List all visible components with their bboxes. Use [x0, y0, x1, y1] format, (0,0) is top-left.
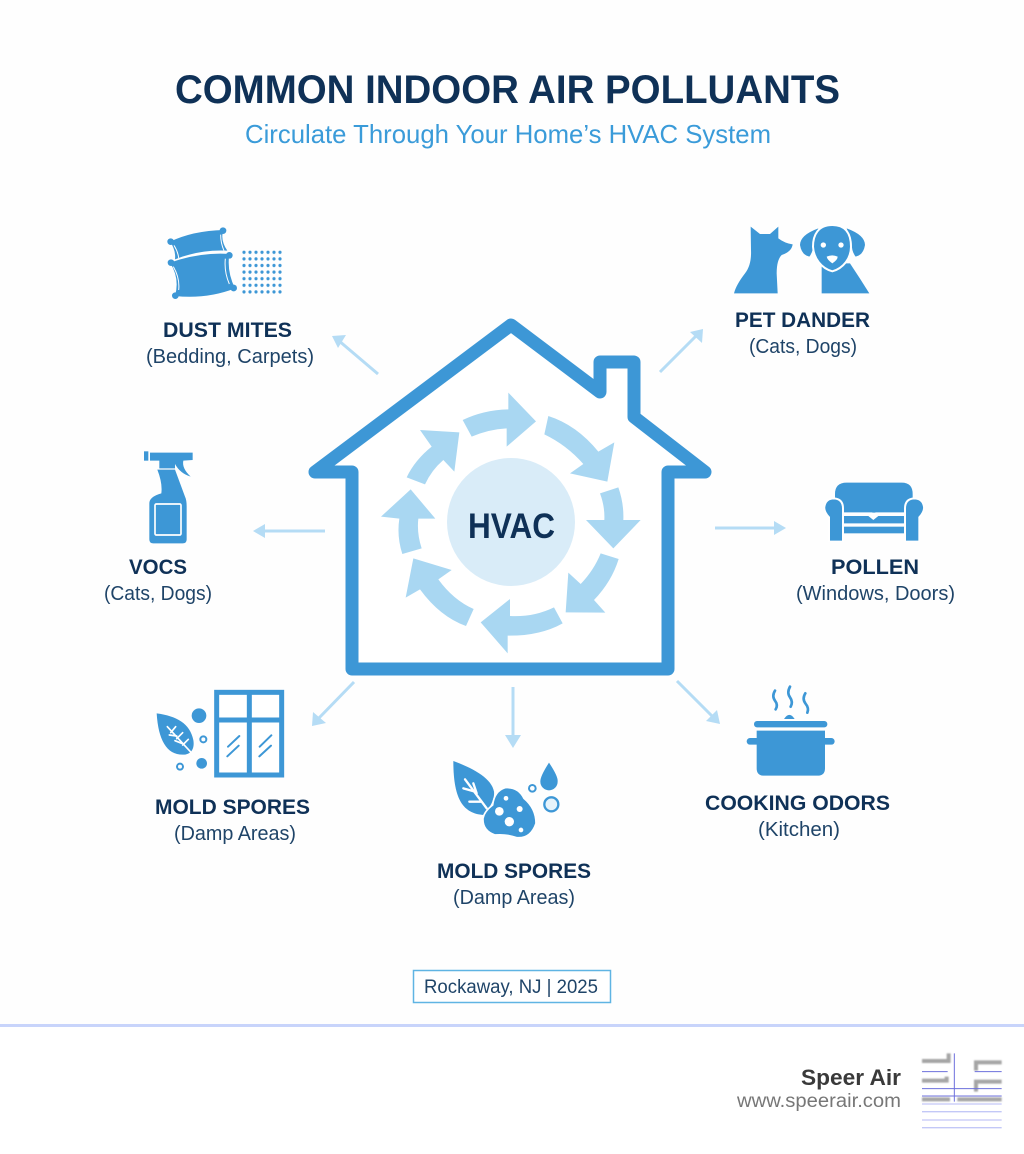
panel: cooking odors [705, 687, 890, 841]
panel: VOCs [104, 451, 212, 605]
footer band [0, 1024, 1024, 1154]
sources: (Cats, Dogs) [104, 583, 212, 605]
brand name: Speer Air [801, 1065, 901, 1090]
location box: Rockaway, NJ | 2025 [424, 977, 598, 998]
location box [414, 970, 610, 1002]
heading: VOCS [129, 556, 187, 579]
heading: PET DANDER [735, 309, 870, 332]
heading: DUST MITES [163, 319, 292, 342]
sources: (Cats, Dogs) [749, 336, 857, 358]
arrow: to pollen [715, 521, 786, 535]
sources: (Windows, Doors) [796, 583, 955, 605]
arrow: to mold spores center [505, 687, 521, 748]
icon: spray bottle [144, 451, 193, 543]
arrow: to pet dander [660, 329, 703, 372]
house outline [315, 325, 705, 669]
subtitle: Circulate Through Your Home’s HVAC System [245, 119, 771, 149]
heading: COOKING ODORS [705, 792, 890, 815]
icon: leaf, spores and window [157, 692, 282, 775]
airflow arrows ring [381, 393, 641, 653]
icon: leaf, mold and droplet [453, 761, 558, 838]
panel: mold spores left [155, 692, 310, 845]
icon: pillows with dust [167, 227, 283, 299]
heading: MOLD SPORES [437, 860, 591, 883]
logo [922, 1053, 1002, 1128]
sources: (Damp Areas) [453, 887, 575, 909]
sources: (Kitchen) [758, 819, 840, 841]
panel: mold spores center [437, 761, 591, 909]
heading: POLLEN [831, 556, 919, 579]
website: www.speerair.com [736, 1091, 901, 1112]
panel: pollen [796, 483, 955, 605]
title: COMMON INDOOR AIR POLLUANTS [175, 68, 840, 112]
icon: steaming pot [747, 687, 835, 776]
arrow: to dust mites [332, 335, 378, 374]
sources: (Damp Areas) [174, 823, 296, 845]
icon: cat and dog [734, 225, 869, 293]
arrow: to VOCs [253, 524, 325, 538]
HVAC hub [447, 458, 575, 586]
HVAC hub: HVAC [468, 507, 555, 546]
heading: MOLD SPORES [155, 796, 310, 819]
sources: (Bedding, Carpets) [146, 346, 314, 368]
arrow: to cooking odors [677, 681, 720, 724]
panel: dust mites [146, 227, 314, 368]
panel: pet dander [734, 225, 870, 358]
icon: sofa [824, 483, 924, 542]
arrow: to mold spores left [312, 682, 354, 726]
